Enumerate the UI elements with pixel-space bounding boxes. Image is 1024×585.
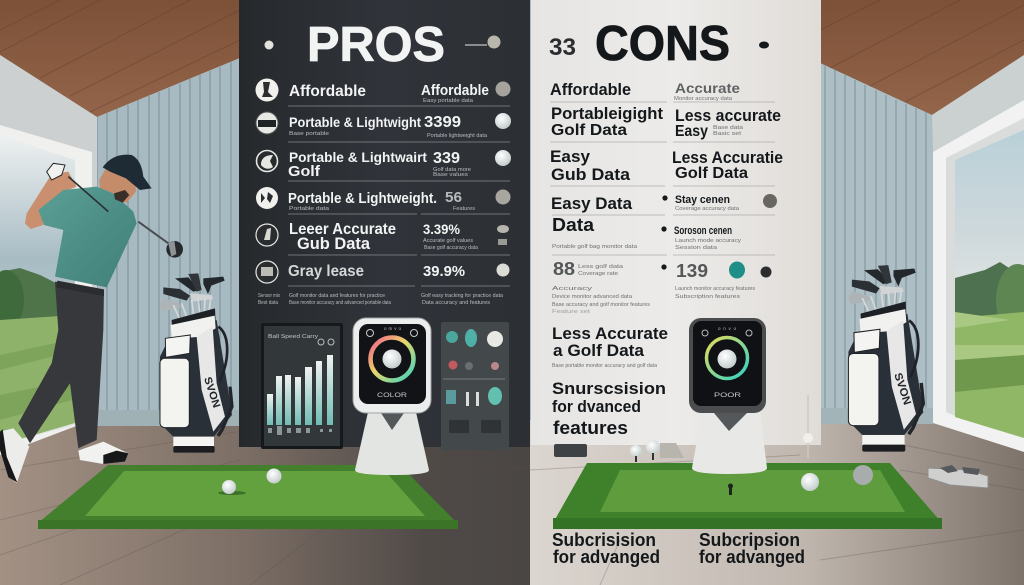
row 4: Stay cenen bbox=[675, 194, 730, 206]
row 4: Data bbox=[552, 215, 595, 235]
device: launch monitor left: omvo bbox=[384, 326, 401, 331]
row 6: 39.9% bbox=[423, 263, 465, 280]
cap bbox=[103, 155, 152, 190]
fine print: Golf monitor data and features for practice bbox=[289, 293, 385, 299]
row 4: Easy Data bbox=[551, 194, 633, 213]
text block: less accurate: Less Accurate bbox=[552, 324, 668, 343]
tablet: bar chart bbox=[261, 323, 343, 449]
golf club upper shaft bbox=[68, 177, 108, 212]
number badge: 33 bbox=[549, 34, 576, 61]
row 4: Features bbox=[453, 206, 476, 212]
row 2: Portable lightweight data bbox=[427, 133, 487, 139]
tee tray accessory bbox=[928, 465, 988, 488]
row 5 bbox=[552, 259, 772, 315]
row 1 bbox=[550, 81, 741, 102]
golfer shirt bbox=[38, 187, 137, 287]
row 5: Less golf data bbox=[578, 264, 623, 270]
bullet bbox=[759, 42, 769, 48]
row 4: Portable golf bag monitor data bbox=[552, 244, 637, 250]
row 1: Accurate bbox=[675, 81, 741, 96]
fine print: Best data bbox=[258, 300, 278, 306]
fine print: Base monitor accuracy and advanced portable data bbox=[289, 300, 391, 306]
heading: pros: PROS bbox=[307, 18, 445, 72]
golf balls on mats bbox=[218, 465, 873, 495]
golf club lower shaft bbox=[138, 222, 168, 243]
row 5: Device monitor advanced data bbox=[552, 294, 632, 300]
cons background props: tee balls and charger bbox=[554, 395, 813, 462]
row 4 bbox=[256, 187, 510, 212]
row 6: Gray lease bbox=[288, 263, 364, 280]
shoe toe bbox=[103, 451, 128, 464]
row 4: Launch mode accuracy bbox=[675, 238, 742, 244]
row 2: Portableigight bbox=[551, 105, 664, 123]
row 5: Gub Data bbox=[297, 235, 371, 253]
right wall panels bbox=[820, 63, 933, 424]
panel: cons bbox=[531, 0, 821, 445]
row 1 bbox=[256, 78, 510, 104]
golf bag left bbox=[159, 273, 232, 453]
row 5: Leeer Accurate bbox=[289, 221, 396, 238]
golfer bbox=[0, 155, 183, 483]
row 4: Session data bbox=[675, 245, 717, 251]
device: launch monitor right: onvo bbox=[718, 326, 736, 331]
row 3: Golf data more bbox=[433, 167, 471, 173]
left wall panels bbox=[97, 58, 240, 426]
row 5: 3.39% bbox=[423, 221, 461, 237]
right ceiling bbox=[820, 0, 1024, 115]
tablet: stats panel bbox=[441, 322, 509, 450]
row 5: Subscription features bbox=[675, 294, 741, 300]
bottom caption right: for advanged bbox=[699, 547, 805, 567]
golfer back shoe bbox=[0, 428, 29, 483]
row 3: Gub Data bbox=[551, 165, 631, 184]
row 5: Accurate golf values bbox=[423, 238, 474, 244]
left putting mat bbox=[38, 465, 458, 529]
back shoe sole bbox=[0, 429, 17, 483]
row 5: 88 bbox=[553, 259, 575, 279]
glove bbox=[47, 163, 65, 180]
row 5 bbox=[256, 221, 509, 253]
row 2: Portable & Lightwight bbox=[289, 114, 421, 130]
tablet: bar chart: Ball Speed Carry bbox=[268, 334, 319, 340]
text block: less accurate bbox=[552, 324, 668, 369]
bottom caption left: for advanged bbox=[553, 547, 660, 567]
fine print: Sensor mix bbox=[258, 293, 280, 299]
row 5: Base accuracy and golf monitor features bbox=[552, 302, 651, 308]
bottom caption left bbox=[552, 530, 660, 567]
row 5: Feature set bbox=[552, 309, 591, 315]
row 3: Less Accuratie bbox=[672, 149, 783, 167]
row 3: Base values bbox=[433, 172, 469, 178]
row 1: Easy portable data bbox=[423, 98, 473, 104]
row 5: Base golf accuracy data bbox=[424, 245, 478, 251]
row 5: Accuracy bbox=[552, 286, 593, 292]
row 5: Launch monitor accuracy features bbox=[675, 286, 756, 292]
right window with golf course view bbox=[932, 55, 1024, 452]
device: launch monitor right bbox=[689, 318, 767, 474]
text block: subscription features bbox=[552, 379, 666, 438]
row 2 bbox=[551, 105, 781, 140]
row 1: Monitor accuracy data bbox=[674, 96, 732, 102]
golfer head bbox=[99, 167, 136, 203]
row dividers bbox=[288, 106, 510, 286]
row 1: Affordable bbox=[289, 83, 366, 100]
row 5: Coverage rate bbox=[578, 271, 618, 277]
golfer belt bbox=[57, 281, 104, 296]
bottom caption left: Subcrisision bbox=[552, 530, 656, 550]
golfer raised arm bbox=[25, 172, 77, 229]
fine print bbox=[258, 293, 503, 306]
device: launch monitor left bbox=[353, 318, 431, 475]
row 3: Golf bbox=[288, 163, 321, 180]
text block: less accurate: Base portable monitor accuracy and golf data bbox=[552, 363, 657, 369]
row 6 bbox=[256, 261, 510, 283]
golfer trousers bbox=[18, 282, 104, 448]
row 3 bbox=[256, 149, 511, 180]
beard bbox=[114, 190, 129, 203]
golf bag right: SVON bbox=[891, 372, 913, 407]
device: launch monitor right: POOR bbox=[714, 392, 741, 399]
row 3: Golf Data bbox=[675, 165, 748, 182]
device: launch monitor left: COLOR bbox=[377, 392, 407, 399]
text block: subscription features: for dvanced bbox=[552, 398, 641, 416]
row 3: 339 bbox=[433, 150, 460, 167]
panel: pros bbox=[239, 0, 530, 447]
row 2: Less accurate bbox=[675, 106, 781, 125]
text block: subscription features: features bbox=[553, 418, 628, 438]
right putting mat bbox=[553, 463, 942, 529]
bottom caption right: Subcripsion bbox=[699, 530, 800, 550]
row 2: Golf Data bbox=[551, 122, 627, 139]
row 4: Coverage accuracy data bbox=[675, 206, 739, 212]
row 3: Portable & Lightwairt bbox=[289, 149, 427, 165]
row 4: Portable & Lightweight. bbox=[288, 191, 437, 207]
row 3 bbox=[550, 147, 783, 184]
fine print: Golf easy tracking for practice data bbox=[421, 293, 503, 299]
left window bbox=[0, 55, 97, 455]
golf bag right bbox=[848, 265, 923, 452]
row 1: Affordable bbox=[421, 83, 489, 99]
text block: less accurate: a Golf Data bbox=[553, 341, 645, 360]
heading: cons: CONS bbox=[595, 17, 730, 71]
row 2: Base data bbox=[713, 125, 743, 131]
fine print: Data accuracy and features bbox=[422, 300, 491, 306]
row 4: Portable data bbox=[289, 206, 329, 212]
row 1: Affordable bbox=[550, 81, 631, 99]
row 5: 139 bbox=[676, 261, 708, 281]
row 4: Soroson cenen bbox=[674, 225, 732, 237]
row 2 bbox=[256, 112, 511, 139]
row 2: Base portable bbox=[289, 131, 329, 137]
bottom caption right bbox=[699, 530, 805, 567]
row 2: Basic set bbox=[713, 131, 742, 137]
row 3: Easy bbox=[550, 147, 591, 166]
left ceiling bbox=[0, 0, 240, 117]
row 2: 3399 bbox=[424, 114, 461, 131]
golf bag left: SVON bbox=[201, 376, 222, 409]
golfer front shoe bbox=[78, 442, 128, 464]
row 4: 56 bbox=[445, 190, 462, 206]
decorative golf dots bbox=[264, 36, 500, 50]
text block: subscription features: Snurscsision bbox=[552, 379, 666, 398]
row 4 bbox=[551, 194, 777, 251]
row 2: Easy bbox=[675, 123, 708, 140]
dividers bbox=[550, 102, 775, 255]
club head bbox=[166, 241, 183, 258]
